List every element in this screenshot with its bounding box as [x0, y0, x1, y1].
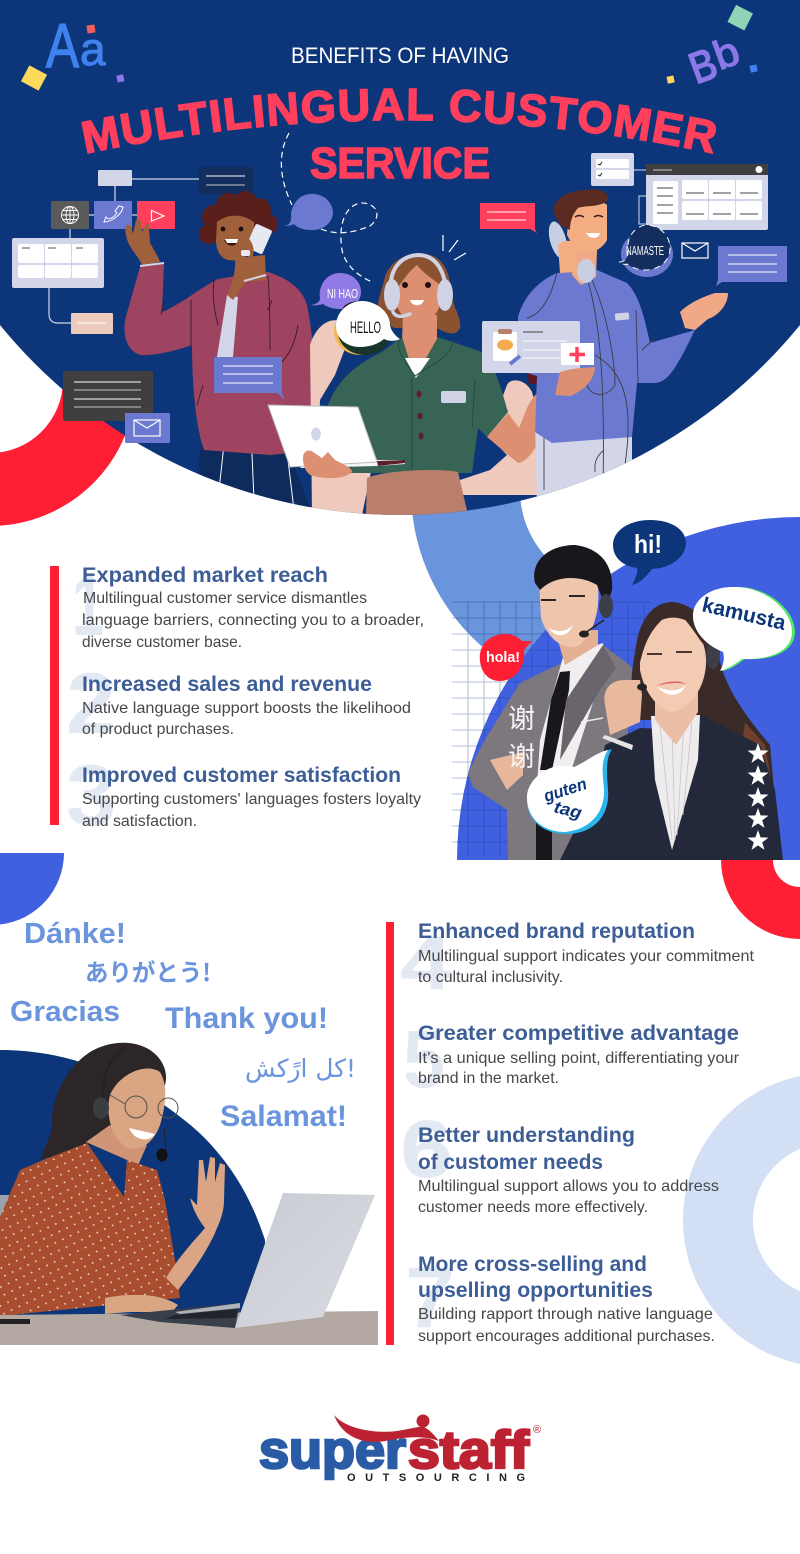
- photo: male agent: [468, 545, 632, 860]
- benefit 2: of product purchases.: [82, 721, 234, 738]
- background decoration: red ring bottom-left of hero: [0, 234, 136, 526]
- dark message panel: [63, 371, 153, 421]
- namaste speech bubble: NAMASTE: [626, 243, 664, 258]
- benefit 5: brand in the market.: [418, 1070, 559, 1087]
- hi speech bubble: hi!: [634, 529, 662, 559]
- decoration: red ring corner: [721, 860, 800, 939]
- jacket seams: [161, 276, 298, 405]
- icon: globe: [62, 206, 78, 224]
- message bubble: [214, 357, 285, 400]
- center woman chair back: [310, 320, 540, 515]
- headset: [389, 253, 446, 280]
- guten tag speech bubble: guten: [540, 774, 589, 806]
- shirt: [217, 295, 238, 357]
- benefit 6: Better understanding: [418, 1124, 635, 1147]
- kamusta speech bubble: kamusta: [700, 593, 788, 635]
- kamusta speech bubble: [693, 587, 795, 671]
- shirt: [536, 643, 605, 800]
- tie: [540, 671, 570, 770]
- title line two: SERVICE: [310, 139, 490, 188]
- suit: [468, 645, 632, 860]
- thank you words: Dánke!: [24, 918, 126, 950]
- benefit 1: language barriers, connecting you to a broader,: [82, 612, 424, 629]
- center woman card: [482, 321, 594, 373]
- background decoration: light blue ring behind agents: [412, 500, 546, 656]
- phone cord: [527, 273, 628, 490]
- benefit 3: Improved customer satisfaction: [82, 764, 401, 787]
- arm: [490, 752, 523, 790]
- icon: phone: [104, 206, 123, 222]
- benefit 7: 7: [405, 1250, 455, 1346]
- photo: female agent: [560, 602, 783, 860]
- dark accent behind card: [527, 373, 537, 384]
- phone: [249, 224, 272, 254]
- thank you words: Thank you!: [165, 1002, 328, 1035]
- hero panel: [0, 0, 800, 530]
- thank you words: [10, 918, 356, 1133]
- benefit 5: It’s a unique selling point, differentiating your: [418, 1050, 740, 1067]
- thank you words: Gracias: [10, 996, 120, 1028]
- hi speech bubble: [613, 520, 686, 585]
- outstretched hand: [680, 293, 728, 330]
- hair: [534, 545, 612, 608]
- arm: [487, 394, 536, 463]
- center woman: [328, 253, 536, 515]
- waving hand and arm: [166, 1157, 225, 1290]
- benefit 1: diverse customer base.: [82, 634, 242, 651]
- logo word staff: staff: [408, 1421, 529, 1480]
- neck: [402, 315, 437, 378]
- benefit 4: to cultural inclusivity.: [418, 969, 563, 986]
- logo dot: [416, 1414, 430, 1428]
- blue message bubble right: [716, 246, 787, 286]
- Aa letter decoration: [21, 12, 125, 91]
- guten tag speech bubble: tag: [552, 797, 584, 823]
- icon: envelope: [682, 243, 708, 258]
- navy backdrop circle: [0, 1050, 265, 1320]
- headset: [706, 641, 720, 669]
- benefit 3: [66, 748, 421, 844]
- decoration: blue corner circle: [0, 853, 64, 924]
- hair parting: [634, 602, 712, 680]
- handset and hand: [548, 222, 566, 258]
- thank you words: شكرًا لك!: [245, 1054, 356, 1083]
- benefit 6: Multilingual support allows you to address: [418, 1178, 719, 1195]
- face: [398, 265, 440, 315]
- NI HAO speech bubble: [311, 273, 361, 309]
- hola speech bubble: hola!: [486, 649, 520, 666]
- shirt: [0, 1143, 180, 1316]
- HELLO speech bubble: [334, 301, 400, 355]
- hands on desk: [105, 1295, 178, 1314]
- benefit 2: Native language support boosts the likelihood: [82, 700, 411, 717]
- benefit 5: 5: [403, 1014, 445, 1105]
- raised hand: [125, 219, 160, 265]
- face: [539, 572, 598, 647]
- jacket: [518, 270, 695, 443]
- benefit 6: 6: [400, 1104, 453, 1195]
- xie xie chinese text: 谢: [508, 704, 535, 734]
- benefit 7: upselling opportunities: [418, 1279, 653, 1302]
- shirt: [328, 337, 508, 473]
- long hair: [632, 605, 775, 800]
- benefit 7: More cross-selling and: [418, 1253, 647, 1276]
- benefit 1: 1: [72, 558, 104, 654]
- thank you words: Salamat!: [220, 1100, 347, 1133]
- photo panel: agent at laptop: [0, 1043, 378, 1345]
- face: [216, 216, 254, 260]
- benefit 7: Building rapport through native language: [418, 1306, 713, 1323]
- chair: [0, 1195, 10, 1235]
- headset: [599, 594, 613, 618]
- red bar: [386, 922, 394, 1345]
- benefit 6: customer needs more effectively.: [418, 1199, 648, 1216]
- hola speech bubble: [480, 634, 532, 681]
- laptop center woman: [268, 405, 405, 478]
- left man with phone: [124, 191, 319, 530]
- Aa letter decoration: A: [46, 12, 80, 81]
- registered mark: ®: [533, 1424, 541, 1436]
- guten tag speech bubble: [527, 749, 612, 834]
- namaste speech bubble: [619, 225, 673, 277]
- neck: [655, 690, 698, 745]
- benefit 5: Greater competitive advantage: [418, 1022, 739, 1045]
- skirt: [366, 470, 468, 515]
- hair: [553, 189, 608, 230]
- left flow diagram: [12, 167, 253, 334]
- benefit 6: [400, 1104, 719, 1216]
- neck: [227, 255, 266, 300]
- Bb letter decoration: b: [708, 29, 745, 79]
- hair: [378, 254, 460, 333]
- benefit 3: Supporting customers' languages fosters loyalty: [82, 791, 421, 808]
- xie xie chinese text: [508, 704, 535, 772]
- neck: [572, 250, 597, 285]
- benefit 1: Multilingual customer service dismantles: [83, 590, 367, 607]
- jacket: [124, 263, 319, 455]
- benefit 4: Enhanced brand reputation: [418, 920, 695, 943]
- icon: play triangle: [152, 210, 164, 221]
- pants: [535, 425, 632, 496]
- head: [567, 203, 607, 250]
- benefit 5: [403, 1014, 740, 1105]
- benefit 1: Expanded market reach: [82, 564, 328, 587]
- face: [108, 1069, 165, 1149]
- hero navy circle: [0, 0, 800, 515]
- five stars: [748, 743, 768, 850]
- Bb letter decoration: B: [682, 37, 724, 94]
- right man: [518, 189, 728, 505]
- neck: [555, 630, 598, 665]
- laptop lid: [235, 1193, 375, 1328]
- NI HAO speech bubble: NI HAO: [327, 286, 358, 301]
- benefit 4: [400, 920, 755, 1006]
- benefits list two: [386, 920, 755, 1346]
- benefit 7: support encourages additional purchases.: [418, 1328, 715, 1345]
- lapel: [560, 645, 616, 760]
- benefit 6: of customer needs: [418, 1151, 603, 1174]
- benefit 7: [405, 1250, 715, 1346]
- benefit 4: Multilingual support indicates your commitment: [418, 948, 755, 965]
- face: [640, 618, 706, 712]
- Bb letter decoration: [666, 5, 758, 94]
- woman's hand over card: [555, 367, 595, 396]
- dashed flight paths: [281, 133, 377, 282]
- benefit 3: 3: [66, 748, 116, 844]
- benefit 2: [66, 656, 411, 752]
- striped shirt: [651, 715, 700, 850]
- blazer: [560, 715, 783, 860]
- logo word outsourcing: OUTSOURCING: [347, 1472, 525, 1484]
- red message bubble: [480, 203, 537, 233]
- HELLO speech bubble: HELLO: [350, 318, 381, 337]
- attention ticks: [443, 235, 466, 260]
- hero illustration clipped to circle: [12, 133, 787, 530]
- hair: [199, 191, 278, 244]
- headset: [103, 1048, 125, 1100]
- hair: [40, 1043, 166, 1160]
- pants: [198, 444, 310, 507]
- right panel checklist: [591, 153, 768, 230]
- Aa letter decoration: a: [80, 23, 106, 75]
- phone on desk: [0, 1319, 30, 1324]
- logo swoosh: [334, 1415, 439, 1442]
- red bar: [50, 566, 59, 825]
- benefit 4: 4: [400, 921, 452, 1006]
- desk: [0, 1311, 378, 1345]
- benefit 3: and satisfaction.: [82, 813, 197, 830]
- speech bubble blue: [283, 194, 333, 230]
- decoration: pale blue ring: [683, 1076, 800, 1364]
- benefit 2: 2: [66, 656, 116, 752]
- title block: [81, 43, 716, 188]
- curved title line: MULTILINGUAL CUSTOMER: [81, 88, 716, 154]
- benefit 1: [72, 558, 424, 654]
- subtitle: BENEFITS OF HAVING: [291, 43, 509, 68]
- logo word super: super: [259, 1421, 406, 1480]
- benefits list one: [50, 558, 424, 844]
- thank you words: ありがとう!: [85, 953, 211, 988]
- xie xie chinese text: 谢: [508, 742, 535, 772]
- envelope box: [125, 413, 170, 443]
- neck and chest: [86, 1125, 147, 1195]
- benefit 2: Increased sales and revenue: [82, 673, 372, 696]
- hand: [604, 680, 642, 735]
- Superstaff logo: [259, 1414, 541, 1484]
- grid pattern: [452, 602, 650, 856]
- laptop base: [120, 1303, 240, 1328]
- glasses: [110, 1095, 178, 1118]
- background decoration: royal blue quarter circle: [457, 517, 800, 860]
